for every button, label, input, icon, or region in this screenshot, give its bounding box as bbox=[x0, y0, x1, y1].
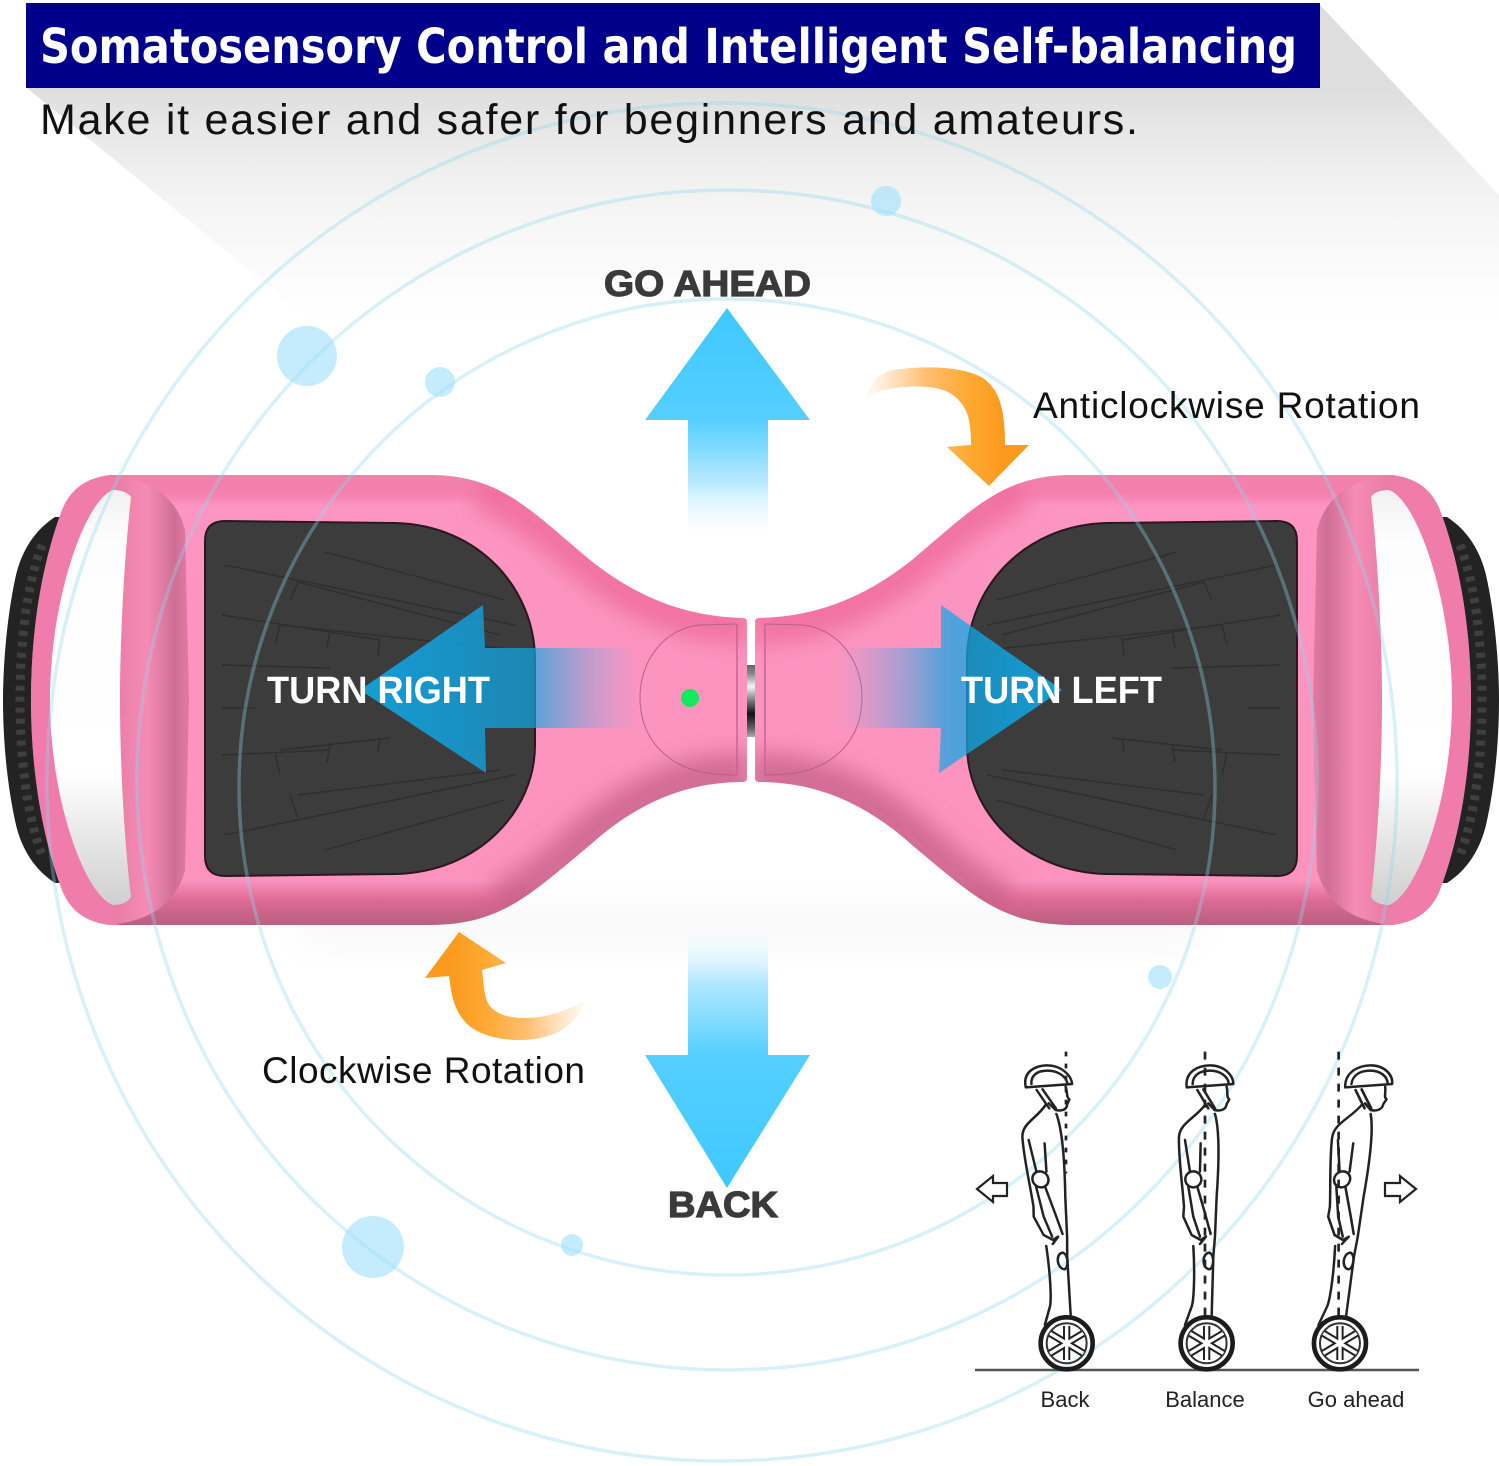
balance diagram bbox=[975, 1052, 1419, 1412]
arrow: anticlockwise rotation bbox=[865, 367, 1029, 486]
label: clockwise rotation: Clockwise Rotation bbox=[262, 1050, 585, 1091]
soft shadow beneath board bbox=[300, 905, 1200, 945]
arrow: back bbox=[645, 922, 810, 1188]
title bar bbox=[26, 3, 1320, 88]
label: turn right: TURN RIGHT bbox=[267, 670, 490, 712]
label: go ahead: GO AHEAD bbox=[604, 263, 811, 304]
label: balance stance: Balance bbox=[1165, 1387, 1245, 1412]
power indicator bbox=[681, 689, 699, 707]
arrow: lean forward bbox=[1385, 1176, 1416, 1202]
left half of hoverboard bbox=[3, 475, 750, 925]
background shadow band bbox=[27, 5, 1499, 320]
decorative sensor dots bbox=[277, 186, 1172, 1278]
label: anticlockwise rotation: Anticlockwise Rotation bbox=[1033, 385, 1420, 426]
label: go ahead stance: Go ahead bbox=[1308, 1387, 1404, 1412]
arrow: go ahead bbox=[645, 308, 810, 542]
label: back: BACK bbox=[668, 1184, 778, 1225]
label: back stance: Back bbox=[1041, 1387, 1090, 1412]
title: Somatosensory Control and Intelligent Self-balancing bbox=[40, 19, 1297, 75]
rider: go ahead bbox=[1312, 1052, 1394, 1369]
rider: balance bbox=[1179, 1052, 1233, 1369]
label: turn left: TURN LEFT bbox=[961, 670, 1162, 712]
subtitle: Make it easier and safer for beginners and amateurs. bbox=[40, 96, 1138, 144]
ground line bbox=[975, 1369, 1419, 1371]
arrow: turn right bbox=[360, 605, 640, 773]
arrow: turn left bbox=[835, 605, 1062, 773]
centre axle bbox=[747, 665, 755, 737]
arrow: clockwise rotation bbox=[425, 932, 585, 1040]
hoverboard bbox=[3, 475, 1499, 925]
rider: back bbox=[1016, 1052, 1093, 1369]
arrow: lean back bbox=[977, 1176, 1007, 1202]
right half of hoverboard bbox=[752, 475, 1499, 925]
